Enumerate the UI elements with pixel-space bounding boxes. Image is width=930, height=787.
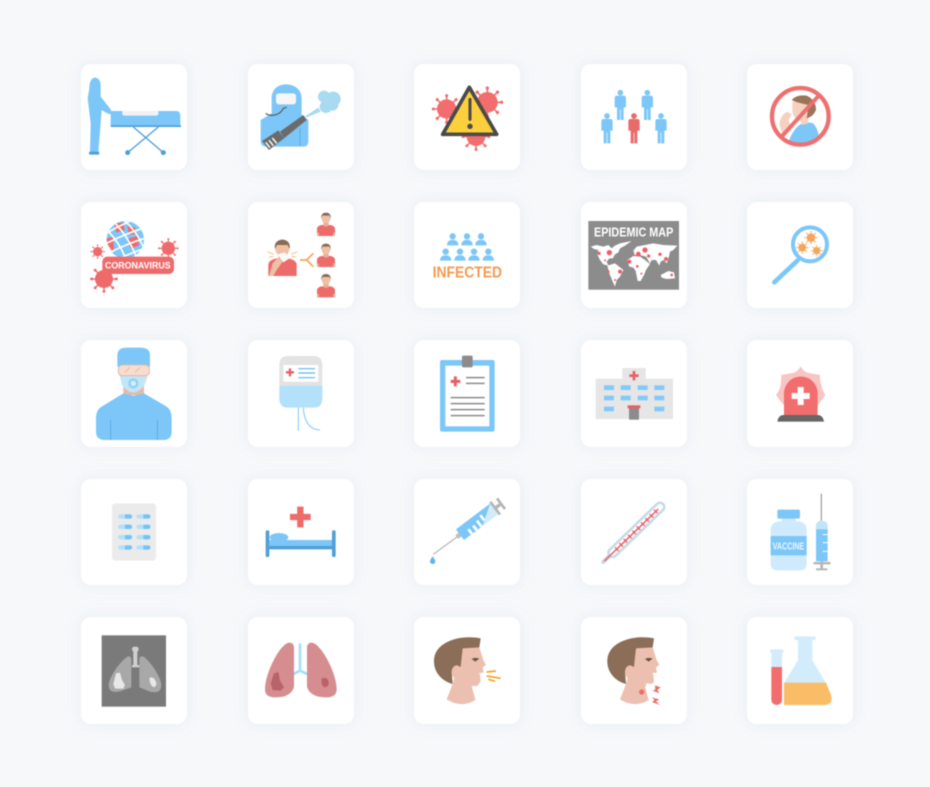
panel: hospital card (581, 340, 687, 447)
panel: infected group card (414, 202, 520, 308)
panel: epidemic map card (581, 202, 687, 308)
panel: clipboard card (414, 340, 520, 447)
icon: IV drip bag (279, 356, 322, 431)
icon: ambulance siren (776, 366, 825, 422)
panel: hospital bed card (248, 479, 354, 585)
icon: thermometer (603, 507, 660, 562)
banner label: CORONAVIRUS (105, 261, 171, 271)
panel: magnifier card (747, 202, 853, 308)
icon: worker with disinfectant sprayer (261, 84, 341, 150)
panel: disinfectant spray card (248, 64, 354, 170)
panel: do not touch face card (747, 64, 853, 170)
icon: sore throat head profile (607, 637, 662, 705)
panel: lab flask card (747, 617, 853, 724)
icon: magnifying glass with viruses (774, 227, 827, 282)
continents (591, 241, 677, 287)
globe (106, 220, 145, 258)
infected label: INFECTED (433, 264, 502, 281)
panel: vaccine card (747, 479, 853, 585)
map title: EPIDEMIC MAP (594, 226, 674, 240)
panel: pills card (81, 479, 187, 585)
panel: coronavirus globe card (81, 202, 187, 308)
icon: chest x-ray (102, 635, 166, 707)
panel: lung x-ray card (81, 617, 187, 724)
icon: medic in protective suit pushing stretcher (88, 78, 181, 155)
panel: IV bag card (248, 340, 354, 447)
icon: medical report clipboard (440, 356, 495, 432)
icon: syringe with drop (430, 497, 507, 564)
panel: lungs card (248, 617, 354, 724)
vaccine bottle: VACCINE (773, 541, 805, 552)
panel: virus warning card (414, 64, 520, 170)
outbreak dots (597, 247, 673, 281)
icon: hospital bed with cross (266, 507, 336, 557)
panel: syringe card (414, 479, 520, 585)
panel: sore throat card (581, 617, 687, 724)
icon: infected lungs (265, 643, 337, 697)
syringe (813, 494, 831, 570)
icon: test tube and flask (770, 636, 832, 705)
panel: crowd with one infected card (581, 64, 687, 170)
panel: sneeze transmission card (248, 202, 354, 308)
icon: blister pack of pills (112, 503, 156, 561)
icon: prohibited face touching (772, 88, 829, 146)
panel: emergency siren card (747, 340, 853, 447)
icon: hospital building (596, 368, 673, 420)
icon: warning triangle with viruses (432, 86, 503, 151)
icon: doctor with mask and goggles (96, 348, 172, 440)
panel: surgeon card (81, 340, 187, 447)
icon: coughing head profile (434, 637, 501, 704)
panel: coughing card (414, 617, 520, 724)
icon: sneezing person spreading to three others (267, 213, 335, 297)
panel: stretcher card (81, 64, 187, 170)
icon: five people, one red (601, 90, 667, 143)
panel: thermometer card (581, 479, 687, 585)
